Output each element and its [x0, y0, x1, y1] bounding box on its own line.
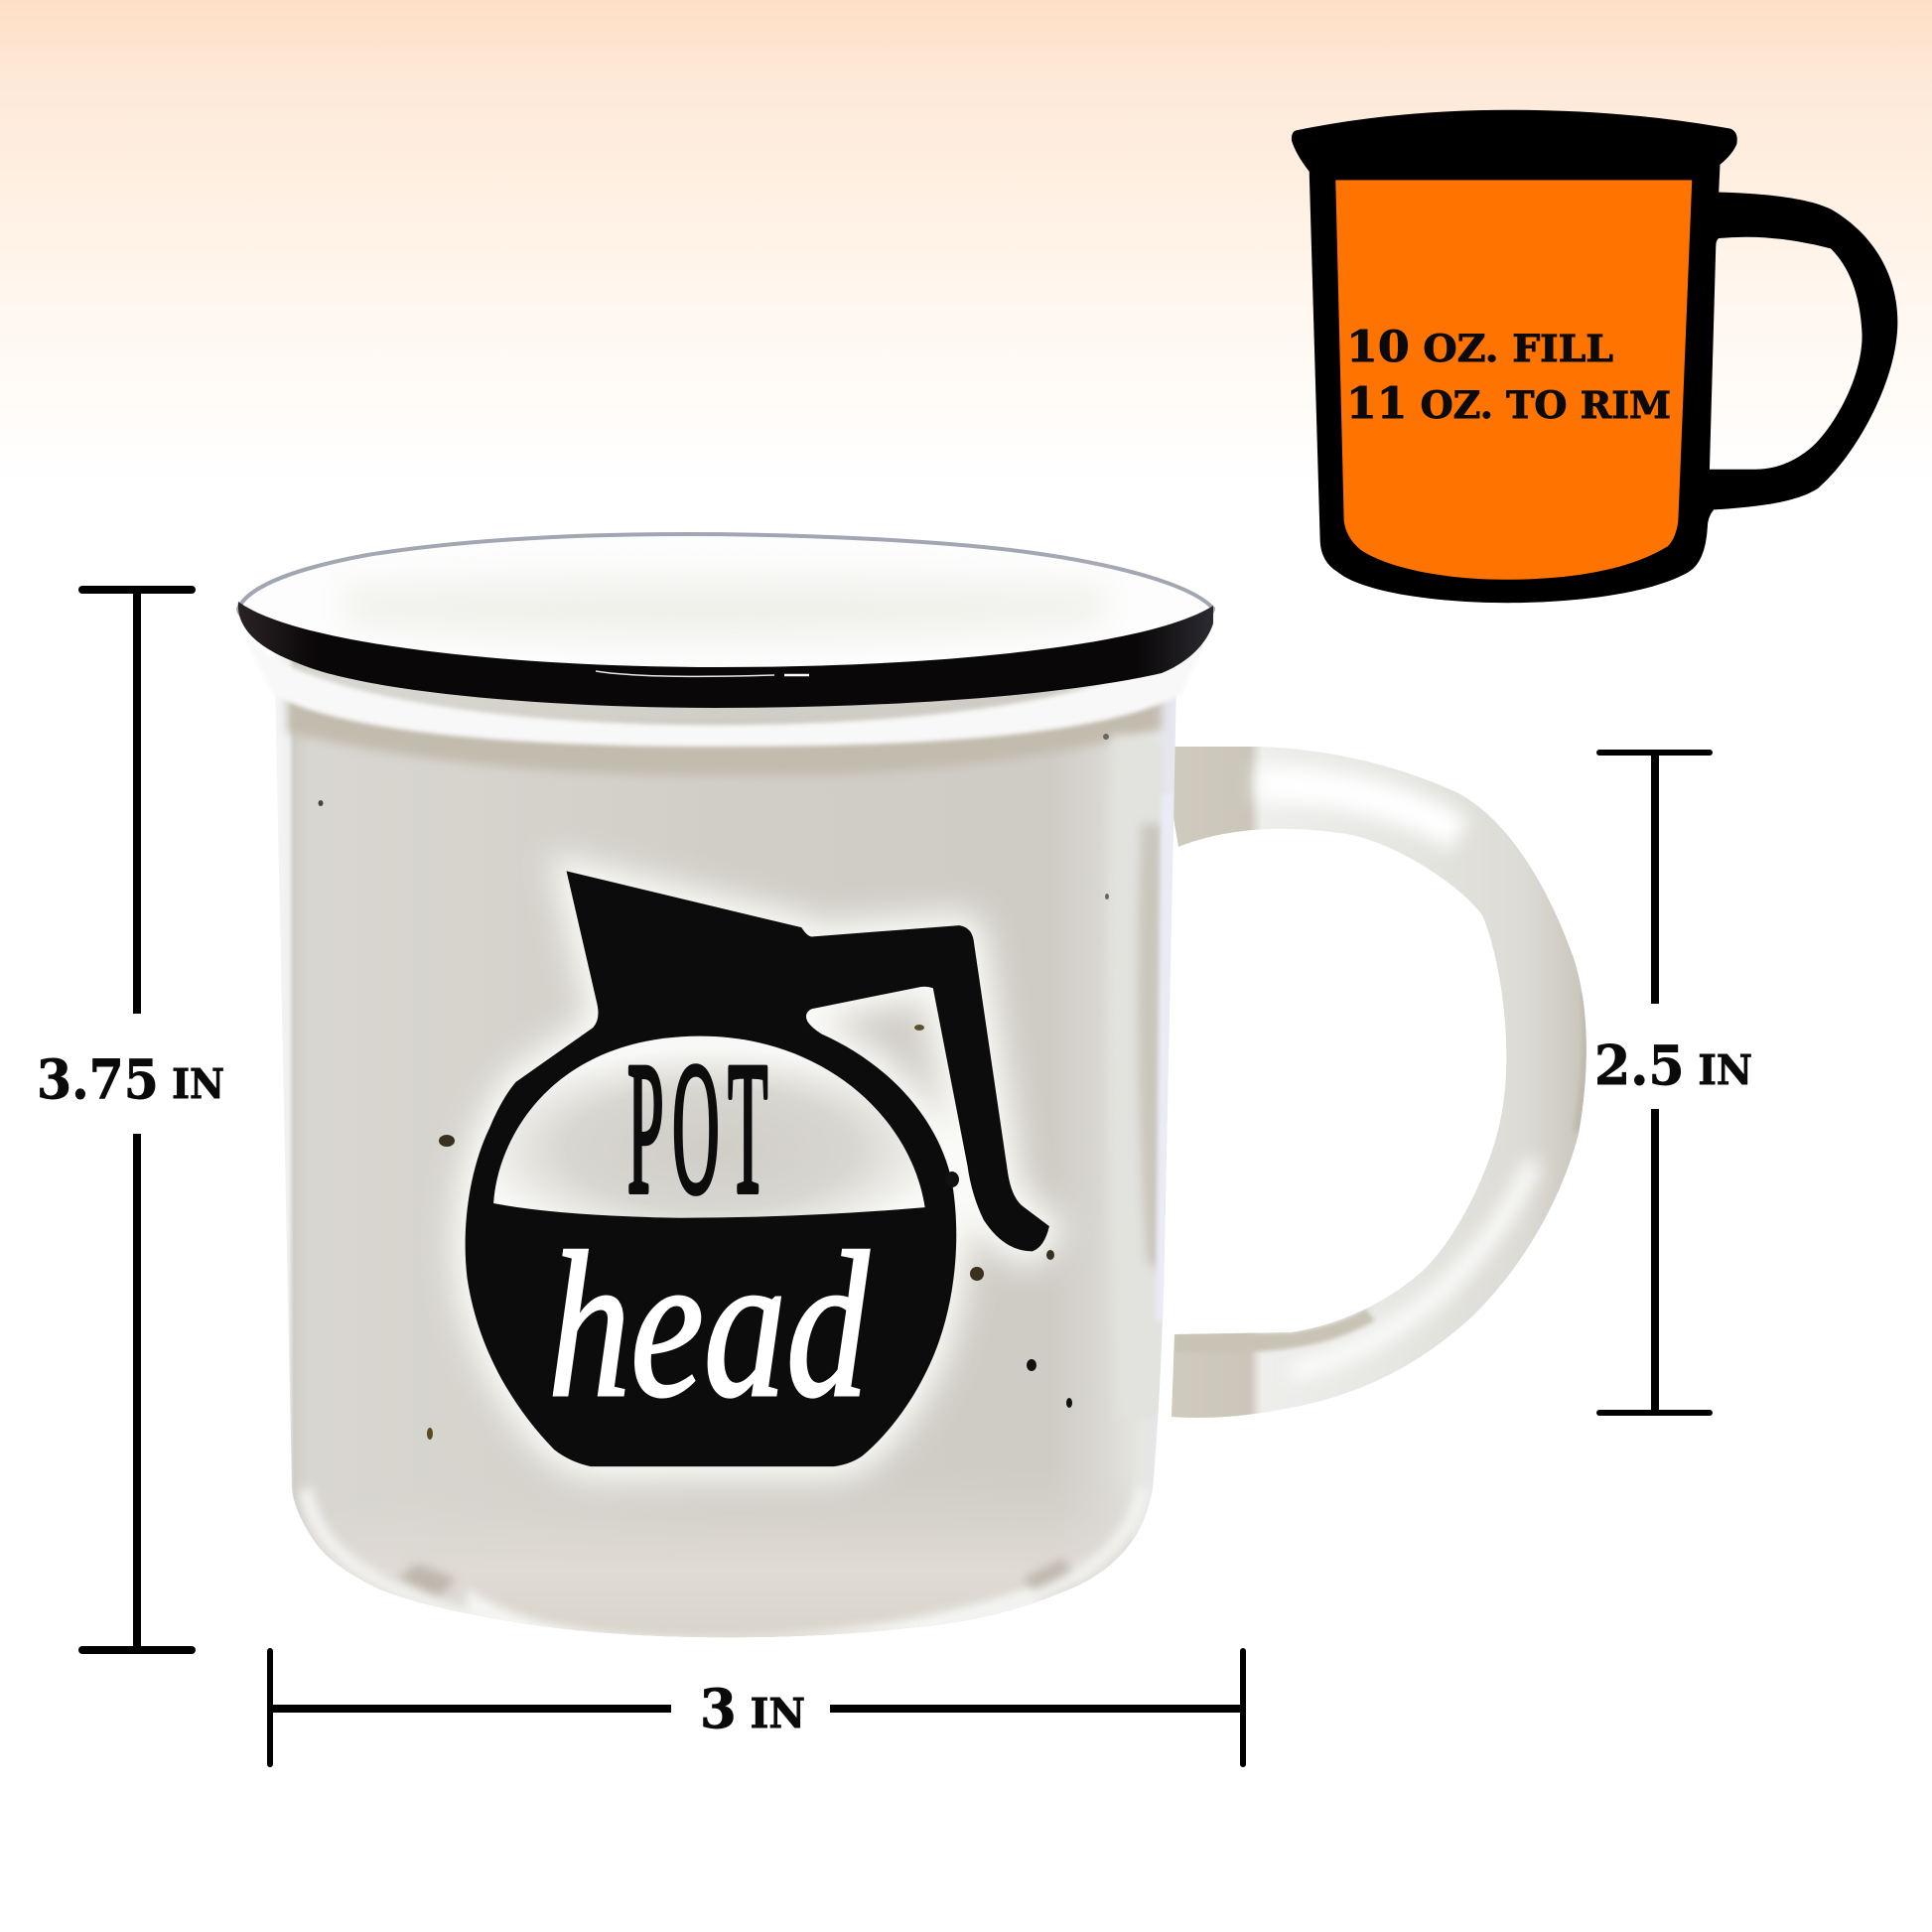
small mug capacity diagram	[1292, 110, 1897, 603]
mug rim	[238, 534, 1213, 747]
head script lettering: head	[548, 1210, 870, 1441]
mug body	[274, 635, 1177, 1653]
width dimension: 3 in: 3 IN	[700, 1677, 805, 1740]
speckles	[318, 734, 1109, 1440]
capacity text: 10 oz: 10 OZ. FILL	[1346, 323, 1613, 372]
coffee pot graphic: POT	[627, 1025, 776, 1233]
capacity text: 11 oz: 11 OZ. TO RIM	[1346, 379, 1671, 429]
photo: enamel mug	[238, 534, 1598, 1653]
height dimension: 3.75 in: 3.75 IN	[37, 1047, 224, 1111]
height dimension: 3.75 in	[37, 586, 224, 1654]
mug silhouette	[1292, 110, 1897, 603]
orange fill	[1335, 180, 1692, 580]
coffee pot graphic	[466, 871, 1049, 1466]
handle dimension: 2.5 in	[1594, 750, 1752, 1416]
background gradient	[0, 0, 1932, 486]
handle dimension: 2.5 in: 2.5 IN	[1594, 1034, 1752, 1097]
width dimension: 3 in	[267, 1648, 1246, 1767]
mug handle	[1162, 747, 1598, 1418]
